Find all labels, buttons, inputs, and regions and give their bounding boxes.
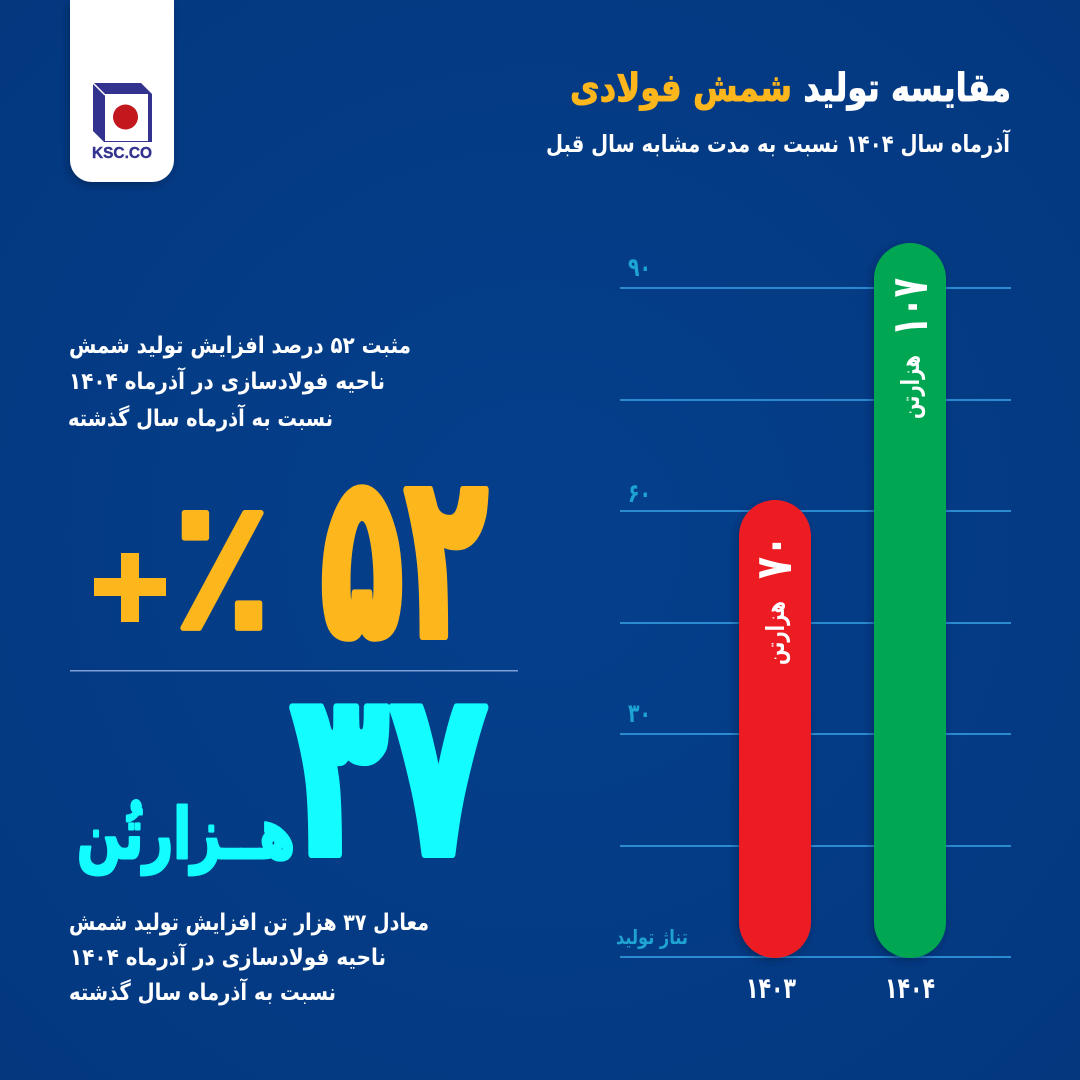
unit: thousand tons: هــزارتُن — [77, 793, 295, 875]
text block: 52 percent description: نسبت به آذرماه سال گذشته — [68, 403, 333, 432]
text block: 37 thousand description: معادل ۳۷ هزار تن افزایش تولید شمش — [69, 910, 429, 936]
axis label 90: ۹۰ — [628, 253, 651, 283]
text block: 37 thousand description — [69, 910, 429, 1006]
logo card — [70, 0, 174, 182]
icon: KSC cube — [93, 83, 152, 142]
big stat: 37 thousand tons: ۳۷ — [290, 641, 488, 909]
text block: 52 percent description: ناحیه فولادسازی در آذرماه ۱۴۰۴ — [69, 366, 385, 395]
big stat: 37 thousand tons — [77, 641, 488, 909]
title: مقایسه تولید شمش فولادی — [570, 66, 1011, 111]
bar unit: هزارتن — [761, 601, 791, 665]
percent sign: ٪ — [172, 460, 272, 671]
big stat: +52%: ۵۲ — [320, 424, 488, 691]
text block: 37 thousand description: ناحیه فولادسازی در آذرماه ۱۴۰۴ — [70, 942, 386, 971]
bar chart — [616, 243, 1011, 1005]
axis label 60: ۶۰ — [628, 479, 651, 509]
year 1404: ۱۴۰۴ — [885, 971, 935, 1005]
subtitle: آذرماه سال ۱۴۰۴ نسبت به مدت مشابه سال قبل — [546, 129, 1011, 158]
axis label 30: ۳۰ — [628, 699, 651, 729]
bar value 107: ۱۰۷ — [881, 278, 939, 336]
grid lines — [620, 288, 1011, 957]
text block: 52 percent description: مثبت ۵۲ درصد افزایش تولید شمش — [69, 333, 411, 359]
year 1403: ۱۴۰۳ — [746, 971, 796, 1005]
divider line — [70, 670, 518, 672]
bar value 70: ۷۰ — [745, 535, 803, 579]
big stat: +52% — [94, 424, 488, 691]
bar 1404 — [874, 243, 946, 958]
text block: 37 thousand description: نسبت به آذرماه سال گذشته — [69, 977, 336, 1006]
logo text: KSC.CO — [92, 145, 152, 162]
plus sign — [94, 553, 166, 622]
bar unit: هزارتن — [896, 355, 926, 419]
bar 1403 — [739, 500, 811, 958]
axis title: تناژ تولید — [616, 925, 688, 949]
text block: 52 percent description — [68, 333, 411, 432]
